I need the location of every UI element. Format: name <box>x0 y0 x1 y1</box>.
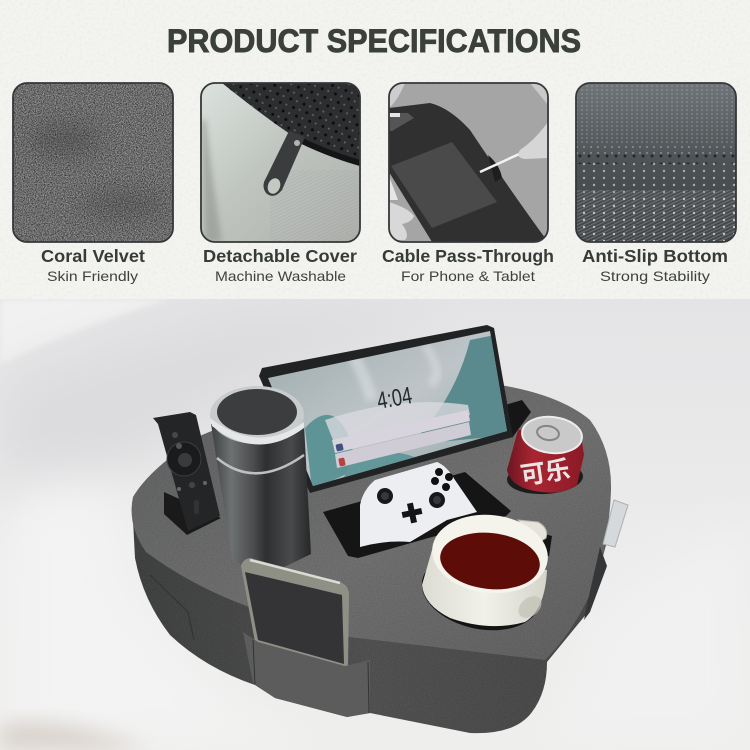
pocket <box>391 142 497 228</box>
tablet screen: 4:04 <box>375 382 414 415</box>
cushion side wall <box>133 524 606 734</box>
sublabel: machine washable: Machine Washable <box>215 268 346 284</box>
tablet <box>259 325 515 495</box>
cup recess <box>415 543 547 641</box>
phone in pocket <box>241 558 370 717</box>
zipper photo <box>201 83 360 242</box>
panel: detachable cover <box>201 83 360 284</box>
panel: coral velvet <box>13 83 173 284</box>
cushion top surface <box>125 380 615 665</box>
dotted fabric <box>576 83 736 242</box>
left side pocket seam <box>150 575 194 640</box>
title: PRODUCT SPECIFICATIONS <box>167 23 581 59</box>
cable photo <box>389 83 548 242</box>
can recess <box>506 460 584 496</box>
remote holder <box>164 492 221 535</box>
handle recess <box>530 530 552 556</box>
sublabel: for phone and tablet: For Phone & Tablet <box>401 268 535 284</box>
sublabel: skin friendly: Skin Friendly <box>47 268 138 284</box>
pen <box>584 500 628 620</box>
steel thermos <box>210 386 311 571</box>
soda can <box>507 414 584 493</box>
label: cable pass-through: Cable Pass-Through <box>382 246 554 266</box>
product photo backdrop <box>0 299 750 750</box>
tea cup <box>422 509 552 626</box>
game controller <box>360 462 477 547</box>
sublabel: strong stability: Strong Stability <box>600 268 710 284</box>
hand left <box>389 202 414 240</box>
controller tray <box>323 472 511 558</box>
tablet slot <box>505 400 531 438</box>
cup handle <box>518 520 547 545</box>
remote control <box>153 412 221 535</box>
front pocket <box>243 632 370 717</box>
notification cards <box>332 410 470 453</box>
cushion <box>125 380 615 740</box>
label: detachable cover: Detachable Cover <box>203 246 357 266</box>
label: anti-slip bottom: Anti-Slip Bottom <box>582 246 728 266</box>
panel: anti-slip bottom <box>576 83 736 284</box>
paper background <box>0 0 750 300</box>
tablet screen <box>268 331 507 486</box>
zipper pull <box>264 131 305 196</box>
cable <box>480 153 518 174</box>
hand right <box>518 122 548 159</box>
panel: cable pass-through <box>382 83 554 284</box>
velvet swatch <box>13 83 173 242</box>
soda can: 可乐 <box>519 456 572 490</box>
label: coral velvet: Coral Velvet <box>41 246 145 266</box>
